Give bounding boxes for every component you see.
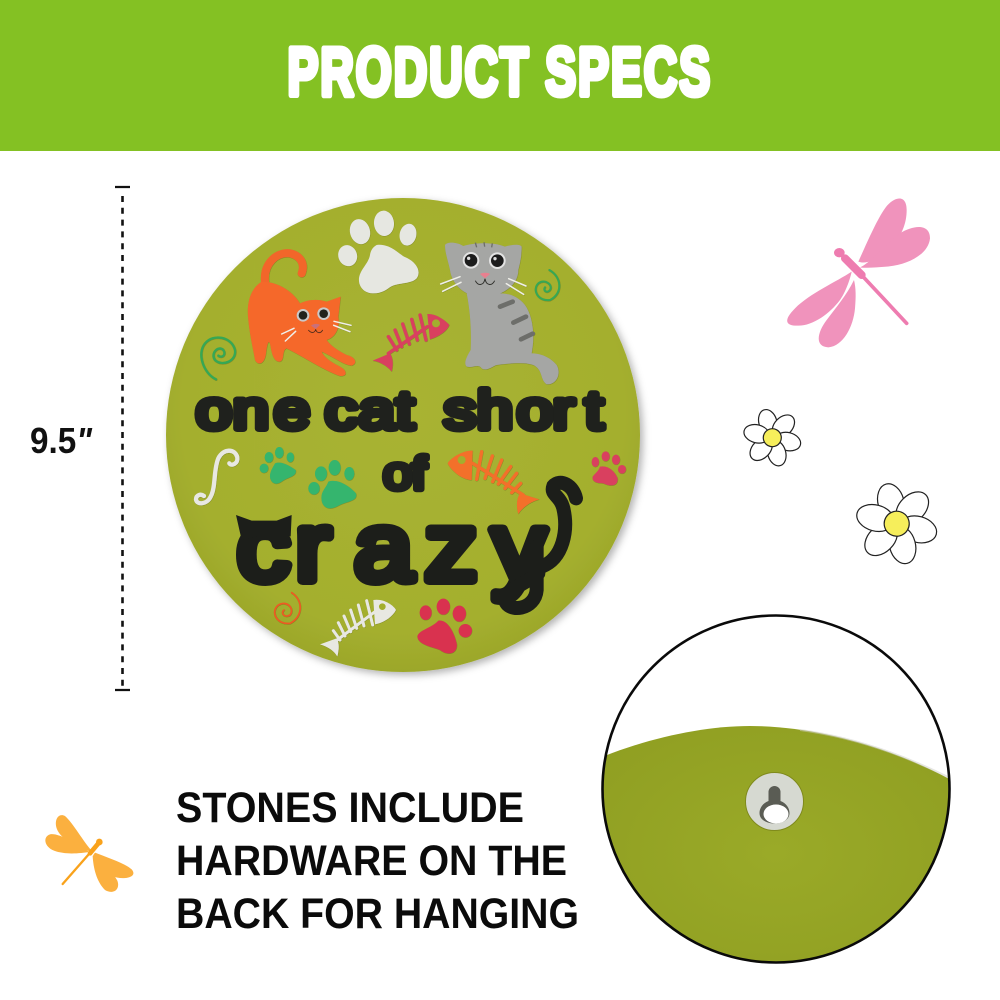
stone text: of: of: [383, 447, 427, 499]
pink dragonfly: [787, 199, 930, 347]
hanging hardware caption: [176, 784, 579, 938]
white fish skeleton: [320, 600, 396, 657]
hanging hardware caption: STONES INCLUDE: [176, 784, 524, 832]
orange spiral: [275, 593, 300, 623]
top decorations: [201, 210, 559, 384]
white squiggle: [196, 451, 237, 503]
dimension label: 9.5": [30, 420, 93, 461]
stone text: one cat short: one cat short: [196, 380, 603, 440]
stepping stone product: [166, 198, 640, 672]
large green paw: [308, 460, 356, 508]
orange cat: [248, 253, 355, 376]
title: PRODUCT SPECS: [288, 34, 712, 110]
small green paw: [260, 447, 296, 484]
keyhole washer: [746, 772, 804, 830]
white paw print: [335, 210, 419, 293]
small red paw right: [592, 451, 626, 485]
large daisy: [846, 473, 948, 574]
orange fish skeleton: [448, 451, 539, 514]
dimension line: 9.5 inch height: [115, 187, 130, 690]
hanging hardware caption: BACK FOR HANGING: [176, 890, 579, 938]
green spiral left: [201, 338, 235, 379]
hanging hardware caption: HARDWARE ON THE: [176, 837, 567, 885]
inset: stone back with keyhole hanger: [590, 616, 960, 980]
green spiral right: [536, 270, 559, 300]
header banner: [0, 0, 1000, 151]
large red paw: [417, 599, 472, 653]
small daisy: [736, 402, 809, 474]
lower decorations: [196, 447, 626, 657]
grey tabby cat: [441, 242, 559, 384]
red fish skeleton: [373, 314, 449, 372]
stone text: crazy with cat ears and tail: crazy: [237, 494, 546, 601]
orange dragonfly: [45, 815, 133, 892]
